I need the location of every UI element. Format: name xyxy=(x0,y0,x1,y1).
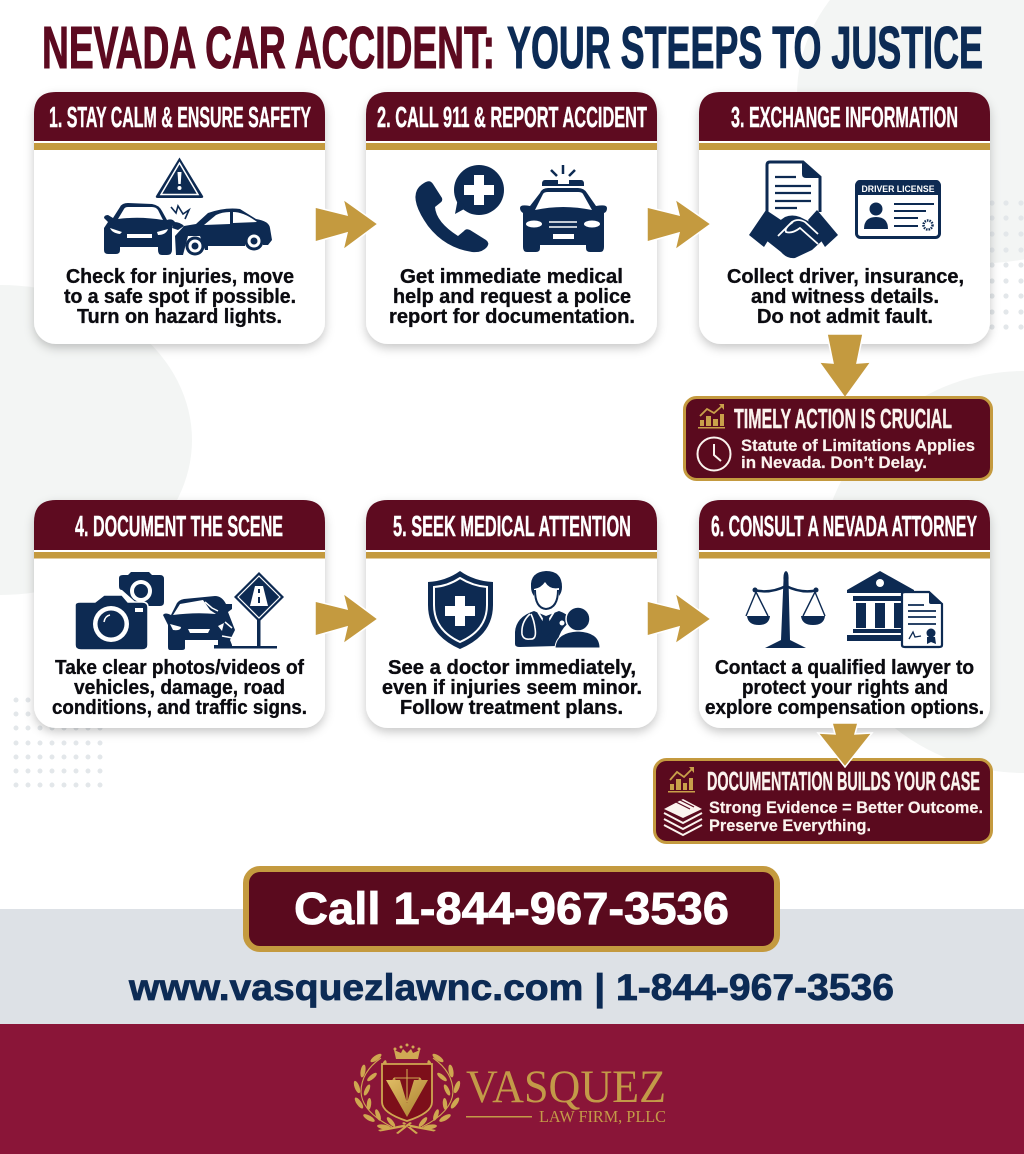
text block: step 2: Get immediate medical xyxy=(400,266,623,288)
title: NEVADA CAR ACCIDENT: xyxy=(42,14,495,81)
text block: step 3: and witness details. xyxy=(751,286,939,308)
text block: step 1 xyxy=(64,266,296,328)
text block: step 4: vehicles, damage, road xyxy=(74,677,285,699)
icon: car crash xyxy=(104,203,272,256)
icon: medical shield xyxy=(428,571,493,649)
text block: step 4 xyxy=(52,657,307,719)
text block: step 1: Turn on hazard lights. xyxy=(77,306,282,328)
logo subline: LAW FIRM, PLLC xyxy=(539,1107,666,1126)
icon: driver license: DRIVER LICENSE xyxy=(862,184,934,194)
icon: document and handshake xyxy=(749,162,838,258)
text block: step 2 xyxy=(389,266,635,328)
panel: step 4 xyxy=(34,500,325,728)
call to action button xyxy=(246,869,777,949)
icon: scales in shield xyxy=(391,1069,423,1102)
callout text: Strong Evidence = Better Outcome. xyxy=(709,799,983,817)
text block: step 3: Collect driver, insurance, xyxy=(727,266,964,288)
icon: cameras xyxy=(75,572,164,650)
icon: stack of books xyxy=(664,799,702,835)
arrow: step 6 to callout xyxy=(818,723,872,767)
icon: road sign xyxy=(214,572,284,648)
heading: step 1: 1. STAY CALM & ENSURE SAFETY xyxy=(49,102,311,134)
contact line: www.vasquezlawnc.com | 1-844-967-3536 xyxy=(128,967,894,1009)
arrow: step 1 to 2 xyxy=(315,199,378,250)
text block: step 6: Contact a qualified lawyer to xyxy=(715,657,974,679)
logo wordmark: VASQUEZ xyxy=(466,1061,666,1113)
text block: step 6: protect your rights and xyxy=(742,677,948,699)
heading: step 2: 2. CALL 911 & REPORT ACCIDENT xyxy=(377,102,647,134)
text block: step 5 xyxy=(382,657,642,719)
text block: step 4: Take clear photos/videos of xyxy=(55,657,304,679)
heading: step 4: 4. DOCUMENT THE SCENE xyxy=(75,511,283,543)
icon: phone and medical bubble xyxy=(415,165,504,252)
callout text xyxy=(741,437,975,472)
text block: step 5: even if injuries seem minor. xyxy=(382,677,642,699)
panel: step 6 xyxy=(699,500,990,728)
icon: laurel wreath xyxy=(353,1052,461,1134)
text block: step 1: to a safe spot if possible. xyxy=(64,286,296,308)
text block: step 6: explore compensation options. xyxy=(705,697,984,719)
text block: step 5: See a doctor immediately, xyxy=(388,657,636,679)
arrow: step 3 to callout xyxy=(819,334,871,398)
callout text xyxy=(709,799,983,835)
heading: step 5: 5. SEEK MEDICAL ATTENTION xyxy=(393,511,631,543)
arrow: step 4 to 5 xyxy=(315,593,378,644)
text block: step 4: conditions, and traffic signs. xyxy=(52,697,307,719)
callout text: Statute of Limitations Applies xyxy=(741,437,975,455)
icon: clock xyxy=(698,438,730,470)
icon: growth chart xyxy=(668,767,695,792)
callout text: Preserve Everything. xyxy=(709,817,871,835)
callout: documentation xyxy=(654,760,992,842)
panel: step 5 xyxy=(366,500,657,728)
contact band xyxy=(0,909,1024,1024)
text block: step 2: help and request a police xyxy=(393,286,631,308)
icon: courthouse and contract xyxy=(847,571,942,647)
icon: driver license xyxy=(856,180,940,238)
callout text: in Nevada. Don’t Delay. xyxy=(741,454,927,472)
icon: shield xyxy=(382,1064,432,1121)
callout: timely action xyxy=(684,398,992,480)
icon: V monogram xyxy=(386,1080,428,1117)
text block: step 5: Follow treatment plans. xyxy=(400,697,623,719)
arrow: step 2 to 3 xyxy=(647,199,711,250)
call to action button: Call 1-844-967-3536 xyxy=(294,883,729,934)
icon: scales of justice xyxy=(746,571,825,648)
text block: step 2: report for documentation. xyxy=(389,306,635,328)
text block: step 3 xyxy=(727,266,964,328)
icon: warning triangle xyxy=(156,158,203,198)
icon: police car xyxy=(520,165,607,252)
panel: step 1 xyxy=(34,92,325,344)
arrow: step 5 to 6 xyxy=(647,593,711,644)
icon: crown xyxy=(394,1044,420,1059)
panel: step 3 xyxy=(699,92,990,344)
footer band xyxy=(0,1024,1024,1154)
text block: step 3: Do not admit fault. xyxy=(757,306,933,328)
text block: step 6 xyxy=(705,657,984,719)
text block: step 1: Check for injuries, move xyxy=(66,266,294,288)
icon: doctor and patient xyxy=(515,571,600,648)
panel: step 2 xyxy=(366,92,657,344)
logo xyxy=(353,1044,666,1134)
icon: growth chart xyxy=(698,404,725,428)
icon: damaged car xyxy=(163,596,235,650)
